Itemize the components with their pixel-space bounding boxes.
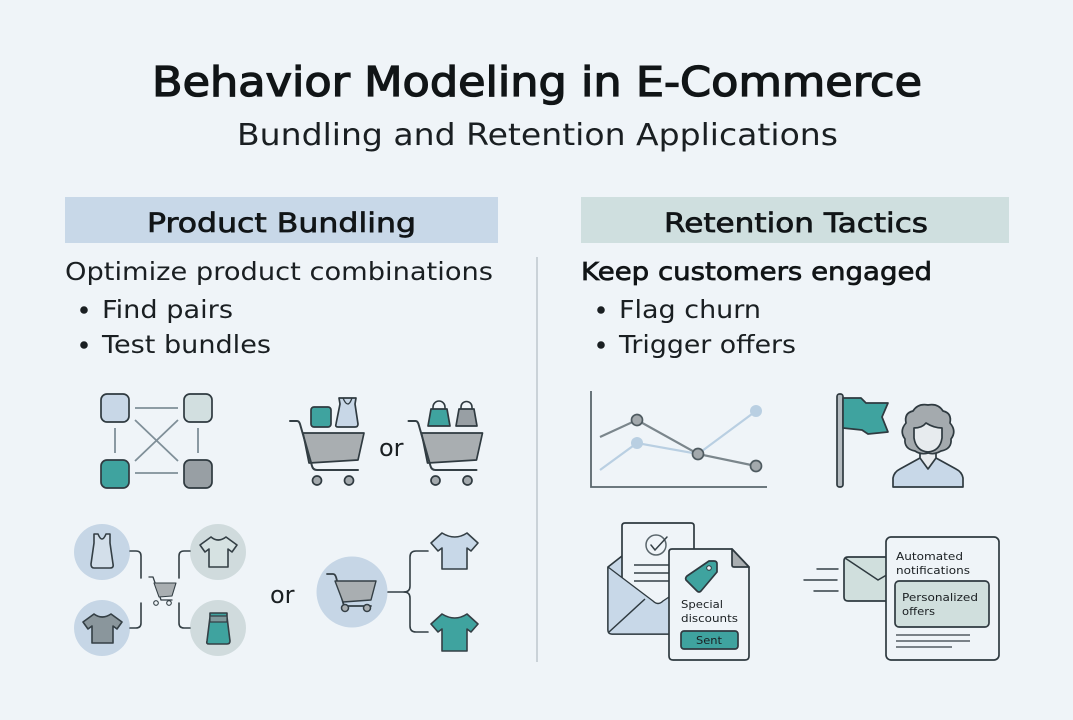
divider [536,257,538,662]
icon: discount document [669,549,749,660]
text block: retention description [581,257,932,359]
subtitle: Bundling and Retention Applications [237,118,838,153]
diagram: cart to two shirts [316,533,478,651]
panel: notification document: Automated [896,550,963,563]
label: or: or [270,581,295,609]
icon: teal shirt [431,614,478,651]
icon: teal skirt [207,613,230,644]
icon: discount document: discounts [681,612,738,625]
text block: bundling description: Find pairs [102,295,233,324]
text block: bundling description: Optimize product combinations [65,257,493,286]
label: or: or [379,434,404,462]
icon: price tag [686,561,717,592]
icon: light shirt [200,537,237,567]
icon: speed lines and envelope [804,557,890,601]
text block: retention description: Keep customers engaged [581,257,932,286]
icon: discount document: Special [681,598,723,611]
icon: grey shirt [83,614,122,643]
heading: retention tactics: Retention Tactics [664,208,928,239]
panel: product bundling [65,197,498,656]
text block: retention description: Trigger offers [618,330,796,359]
callout: personalized offers [895,581,989,627]
icon: cart with square and dress [290,398,364,485]
panel: notification document [886,537,999,660]
icon: small cart [149,577,176,605]
panel: notification document: notifications [896,564,970,577]
icon: customer [893,405,963,487]
heading: retention tactics [581,197,1009,243]
icon: flag [837,394,888,487]
icon: envelope with letter [608,523,694,634]
icon: tank top [91,534,113,568]
text block: retention description: Flag churn [619,295,761,324]
panel: retention tactics [581,197,1009,660]
text block: bundling description: Test bundles [101,330,271,359]
diagram: four products into one cart [74,524,246,656]
callout: personalized offers: offers [902,605,935,618]
line chart: churn trend [591,391,767,487]
heading: product bundling [65,197,498,243]
title: Behavior Modeling in E-Commerce [152,58,922,106]
heading: product bundling: Product Bundling [147,208,416,239]
callout: personalized offers: Personalized [902,591,978,604]
icon: blue shirt [431,533,478,569]
icon: cart with two bags [408,401,482,485]
button: sent: Sent [696,634,723,647]
text block: bundling description [65,257,493,359]
icon: product pair network [101,394,212,488]
